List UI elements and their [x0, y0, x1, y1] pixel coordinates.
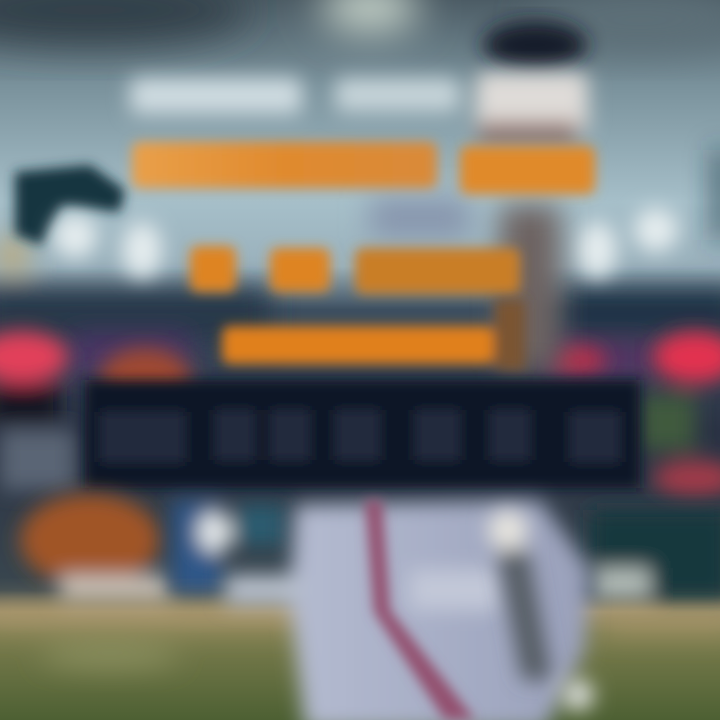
- title text bar (blurred white): [130, 72, 588, 142]
- table columns: [100, 410, 620, 462]
- orange subtitle row: [190, 246, 520, 294]
- field: [0, 604, 720, 667]
- orange headline bars: [132, 142, 595, 194]
- right dark teal wall: [590, 510, 720, 600]
- stadium lights: [53, 208, 678, 278]
- player neck and torso behind headline: [370, 198, 560, 370]
- stadium stands: [0, 150, 720, 375]
- orange ball shape: [20, 494, 170, 605]
- jersey red stripe: [365, 500, 475, 720]
- player cap: [483, 21, 587, 69]
- clouds: [0, 0, 720, 50]
- red awnings: [0, 331, 720, 496]
- blue banner: [172, 500, 285, 595]
- orange third row: [222, 300, 525, 370]
- player arm and hand: [488, 510, 594, 711]
- dark table panel: [85, 380, 640, 488]
- dark scoreboard tower: [15, 165, 125, 245]
- player jersey: [225, 500, 590, 720]
